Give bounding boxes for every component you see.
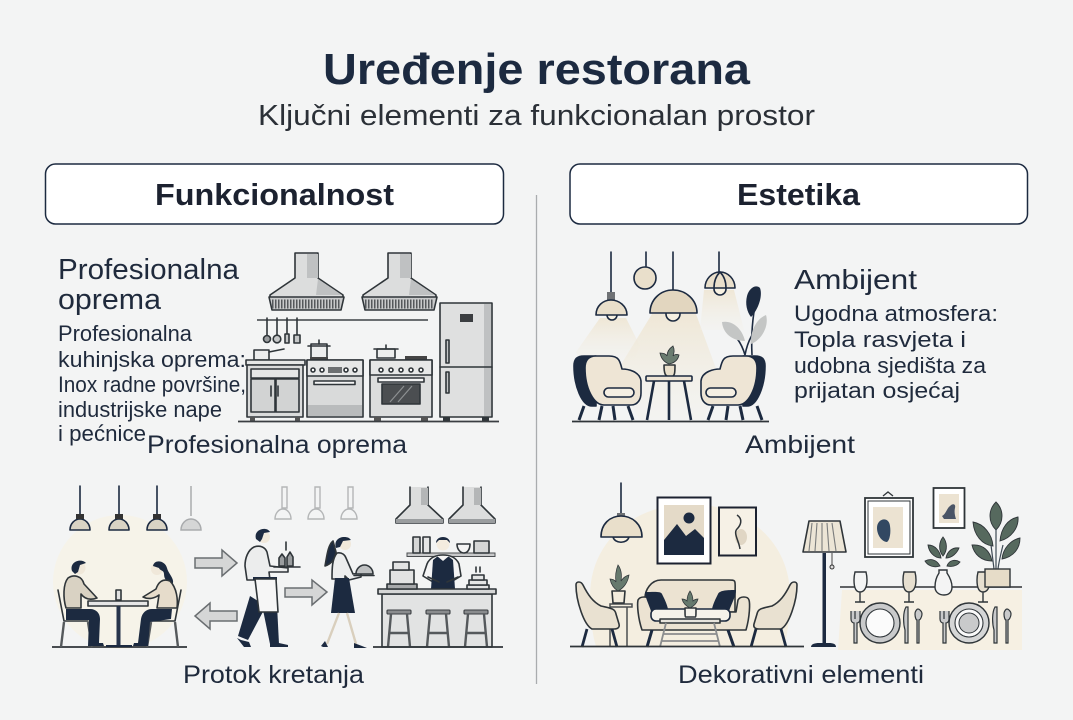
text block: Ambijent: udobna sjedišta za (794, 353, 987, 378)
icon: lounge with art (570, 483, 804, 647)
icon: table setting with art (838, 488, 1022, 650)
text block: Profesionalna oprema: Profesionalna (58, 254, 240, 286)
icon: waiter with tray (237, 529, 300, 647)
icon: counter hoods (396, 487, 495, 523)
title: Uređenje restorana (323, 45, 751, 94)
icon: pale background lamps (275, 487, 357, 519)
icon: left armchair (574, 356, 641, 420)
caption: Dekorativni elementi: Dekorativni elementi (678, 661, 924, 689)
icon: potted plant leaves (722, 286, 767, 355)
icon: chef and shelf (407, 537, 495, 589)
icon: stove one (307, 340, 363, 417)
icon: waitress with cloche (321, 537, 374, 648)
panel: Funkcionalnost (46, 164, 504, 689)
icon: stove two with oven (370, 345, 432, 421)
icon: floor lamp (803, 521, 846, 647)
illustration: decorative elements (570, 483, 1022, 650)
icon: fridge (440, 303, 492, 421)
heading: Estetika (570, 164, 1028, 224)
arrow: right to waiter (195, 550, 237, 576)
text block: Profesionalna oprema: Profesionalna (58, 321, 193, 346)
illustration: service flow (52, 486, 503, 649)
icon: cabinet with pan (246, 349, 305, 421)
caption: Profesionalna oprema: Profesionalna oprema (147, 431, 407, 459)
text block: Ambijent: prijatan osjećaj (794, 378, 960, 403)
text block: Profesionalna oprema: kuhinjska oprema: (58, 347, 246, 372)
icon: side table with plant (646, 346, 692, 420)
icon: extractor hoods (269, 253, 437, 310)
panel: Estetika (570, 164, 1028, 689)
icon: light beams (576, 290, 744, 420)
heading: Funkcionalnost (46, 164, 504, 224)
text block: Profesionalna oprema (58, 254, 246, 446)
text block: Profesionalna oprema: oprema (58, 284, 162, 316)
text block: Profesionalna oprema: Inox radne površine, (58, 372, 246, 397)
subtitle: Ključni elementi za funkcionalan prostor (258, 100, 815, 132)
icon: counter with stools (373, 562, 503, 647)
icon: dining guests under lamps (52, 486, 201, 649)
text block: Ambijent: Ugodna atmosfera: (794, 301, 998, 326)
arrow: right to counter (285, 580, 327, 605)
icon: pendant lamps (596, 252, 735, 321)
heading: Funkcionalnost: Funkcionalnost (155, 177, 394, 212)
caption: Ambijent: Ambijent (745, 431, 855, 459)
heading: Estetika: Estetika (737, 177, 861, 212)
text block: Ambijent (794, 264, 998, 403)
icon: right armchair (701, 356, 765, 420)
text block: Ambijent: Topla rasvjeta i (794, 327, 966, 352)
text block: Profesionalna oprema: industrijske nape (58, 397, 222, 422)
caption: Protok kretanja: Protok kretanja (183, 661, 364, 689)
text block: Profesionalna oprema: i pećnice (58, 421, 146, 446)
text block: Ambijent: Ambijent (794, 264, 917, 295)
illustration: ambient lounge (572, 252, 769, 422)
icon: utensil rail (257, 318, 428, 343)
illustration: professional kitchen (238, 253, 499, 422)
arrow: left to guests (195, 603, 237, 629)
